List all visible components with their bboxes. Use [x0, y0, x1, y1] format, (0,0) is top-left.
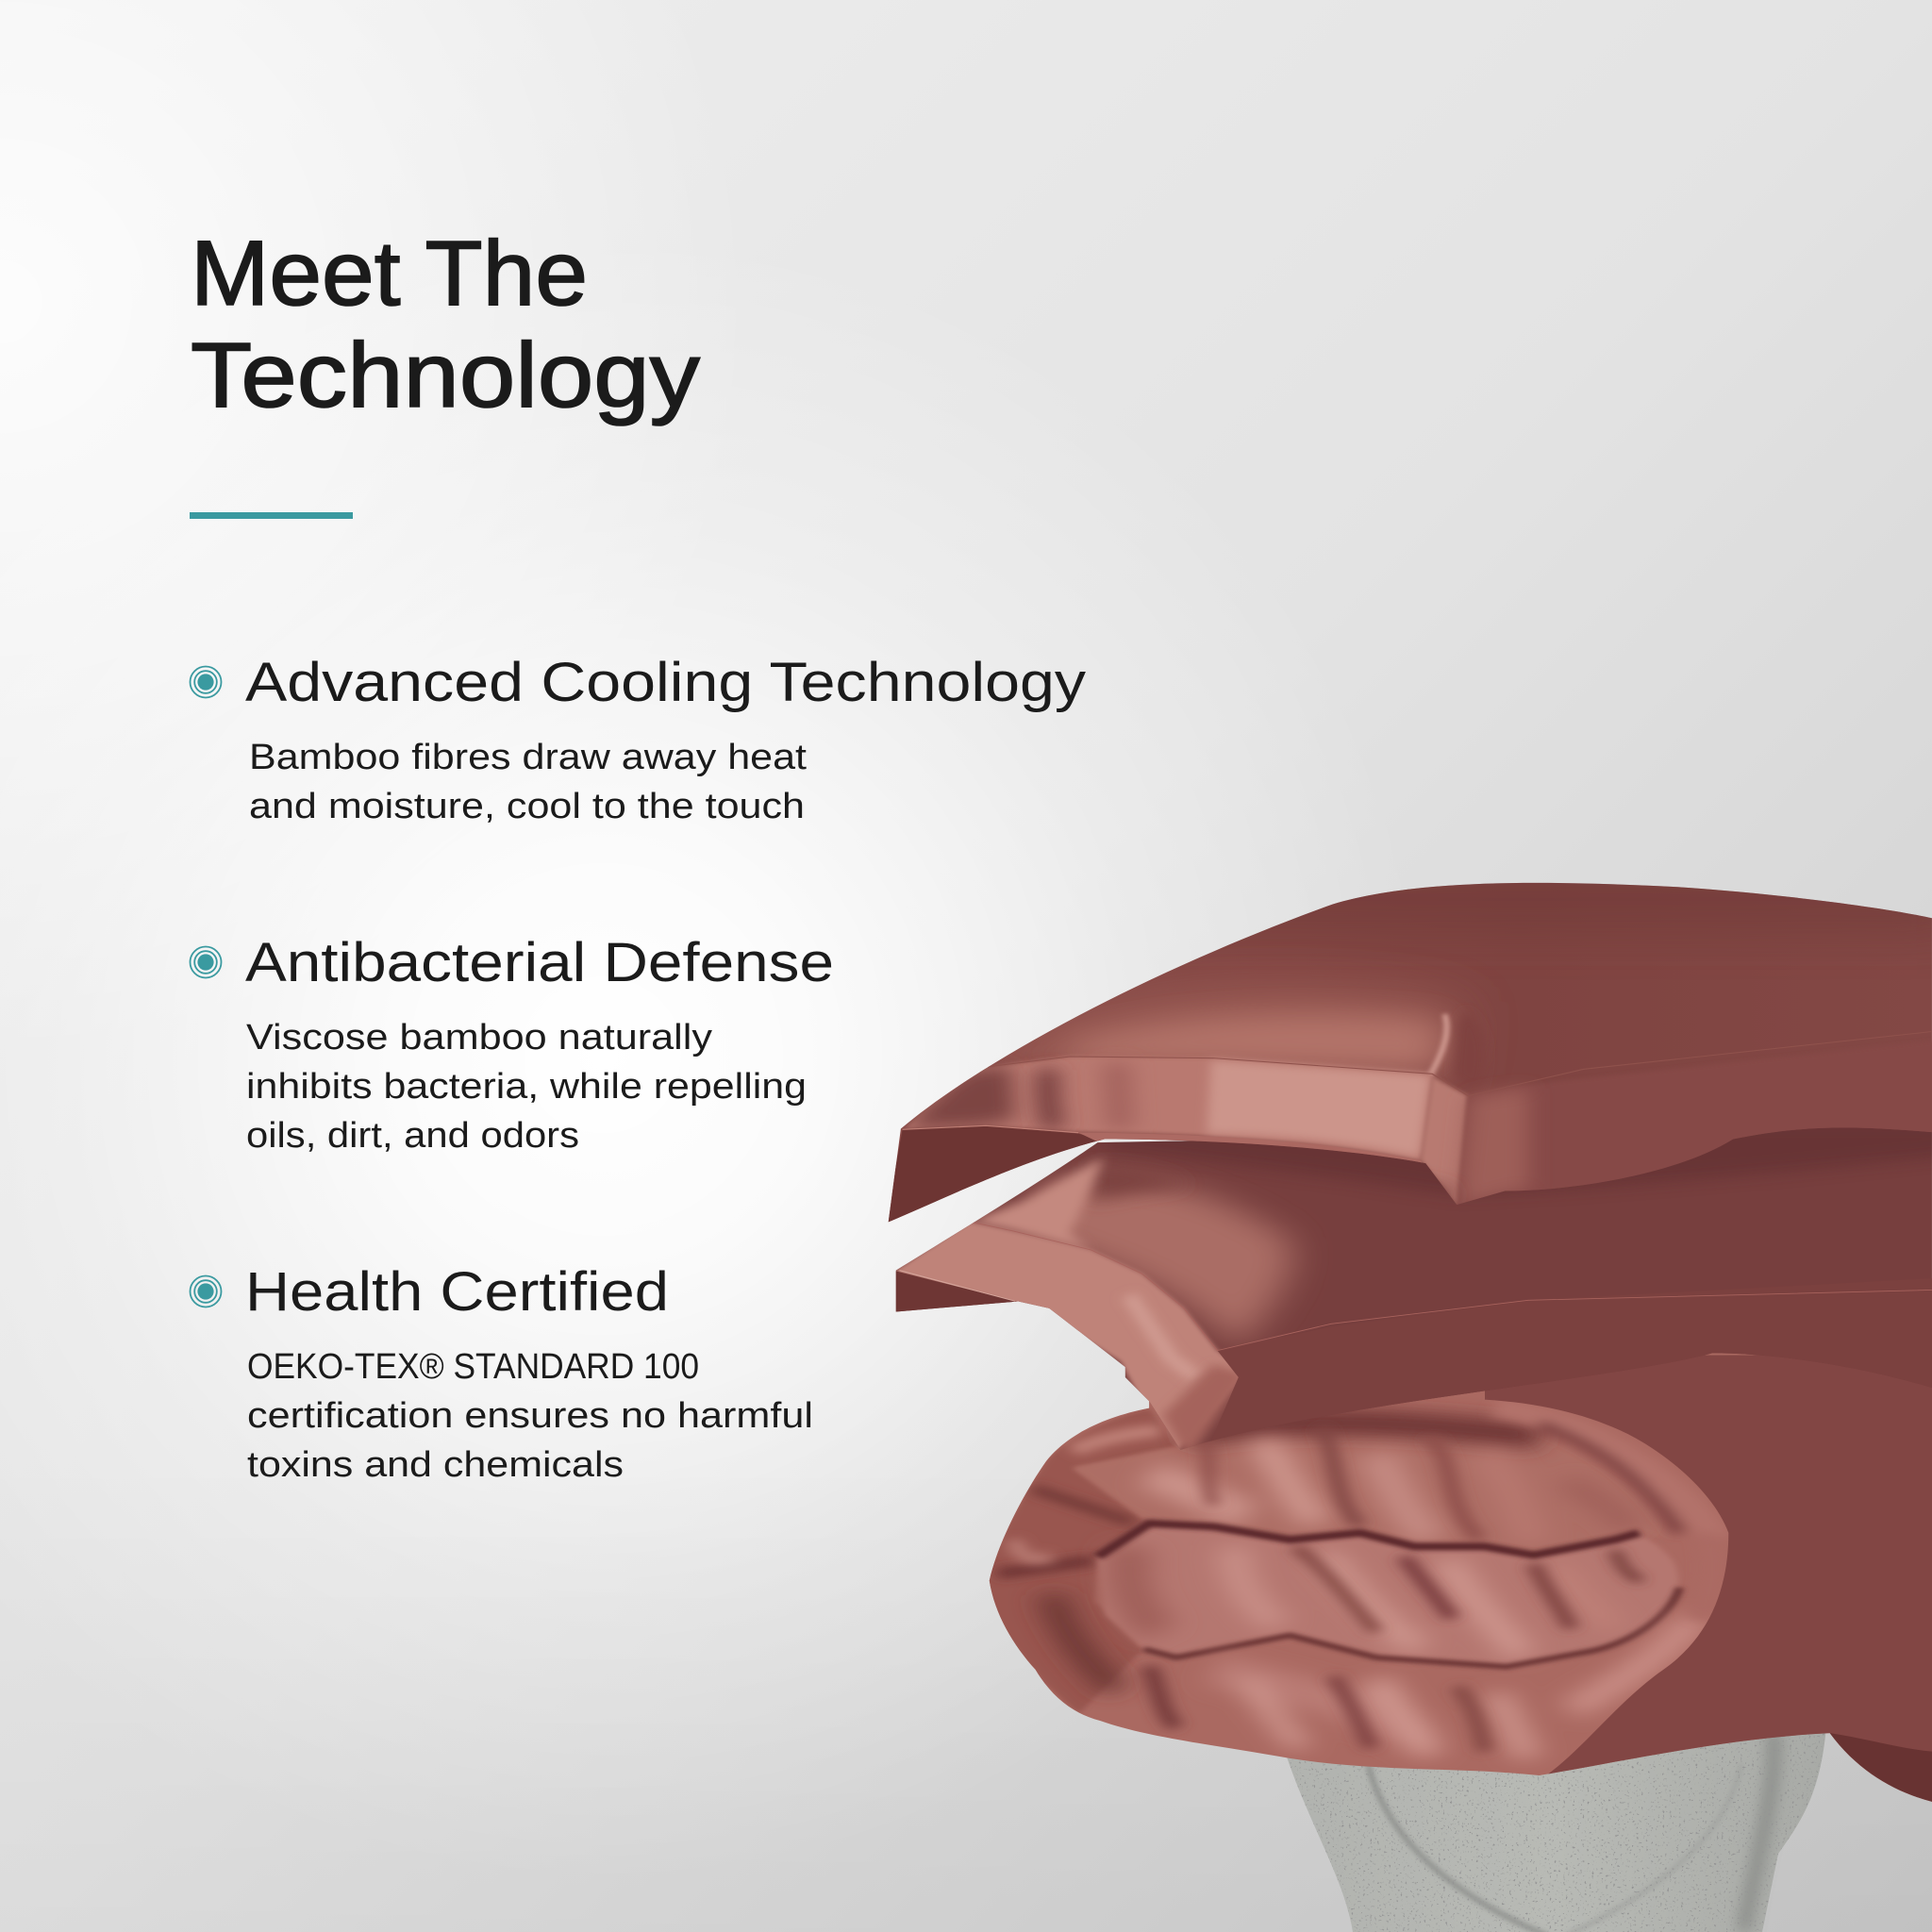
- description: oils, dirt, and odors: [246, 1116, 579, 1156]
- description: Bamboo fibres draw away heat: [249, 738, 807, 777]
- heading: Health Certified: [245, 1261, 669, 1323]
- right flange: [1457, 1038, 1932, 1276]
- lower right fold: [1830, 1733, 1932, 1802]
- fold between lobes: [1098, 1524, 1640, 1557]
- lobes and rim, drawn in roll crop coordinates: [975, 1356, 1932, 1840]
- stitch: [969, 1222, 1932, 1351]
- stone head: [1283, 1726, 1826, 1932]
- duvet roll: [989, 1353, 1932, 1802]
- corner fold: [1421, 1077, 1468, 1206]
- icon: teal target bullet: [191, 947, 221, 977]
- stitch: [969, 1028, 1932, 1096]
- shadow from top pillow: [1108, 1128, 1932, 1192]
- flat duvet panel: [1485, 1356, 1932, 1840]
- upper right rim: [1491, 1403, 1716, 1536]
- flange band: [905, 1057, 1432, 1160]
- upper pillow: [889, 883, 1932, 1223]
- description: toxins and chemicals: [247, 1445, 624, 1485]
- feature: antibacterial: [191, 932, 834, 1156]
- description: [246, 1018, 807, 1156]
- feature: health certified: [191, 1261, 813, 1485]
- crown sheen: [1037, 1179, 1292, 1346]
- lower lobe outline: [1143, 1588, 1680, 1667]
- description: certification ensures no harmful: [247, 1396, 813, 1436]
- icon: teal target bullet: [191, 666, 221, 698]
- description: and moisture, cool to the touch: [249, 787, 805, 826]
- left rim shading: [975, 1408, 1176, 1714]
- upper lobe: [1078, 1448, 1174, 1518]
- broad crown sheen: [991, 981, 1455, 1066]
- description: OEKO-TEX® STANDARD 100: [247, 1347, 699, 1387]
- product: bamboo bedding stack on stone head: [877, 868, 1932, 1932]
- title: Technology: [191, 324, 701, 426]
- crown sheen: [1070, 1016, 1441, 1069]
- description: Viscose bamboo naturally: [246, 1018, 712, 1058]
- accent rule: [190, 512, 353, 519]
- description: [249, 738, 807, 826]
- description: [247, 1347, 813, 1485]
- lower lobe: [1098, 1524, 1678, 1666]
- title: Meet The: [191, 222, 588, 325]
- feature: advanced cooling: [191, 652, 1086, 826]
- heading: Antibacterial Defense: [245, 932, 834, 993]
- description: inhibits bacteria, while repelling: [246, 1067, 807, 1107]
- icon: teal target bullet: [191, 1275, 221, 1307]
- title: [191, 222, 701, 426]
- top shading: [1238, 883, 1932, 941]
- main flange: [893, 1222, 1247, 1459]
- front flange right: [1218, 1278, 1932, 1413]
- heading: Advanced Cooling Technology: [245, 652, 1086, 713]
- underside lining: [1078, 1133, 1457, 1206]
- lower pillow: [887, 1120, 1932, 1472]
- upper bright wedge: [969, 1158, 1104, 1250]
- inner dark opening: [885, 1125, 1129, 1226]
- bottom rim creases: [1214, 1618, 1696, 1758]
- left dark flap: [896, 1272, 1017, 1311]
